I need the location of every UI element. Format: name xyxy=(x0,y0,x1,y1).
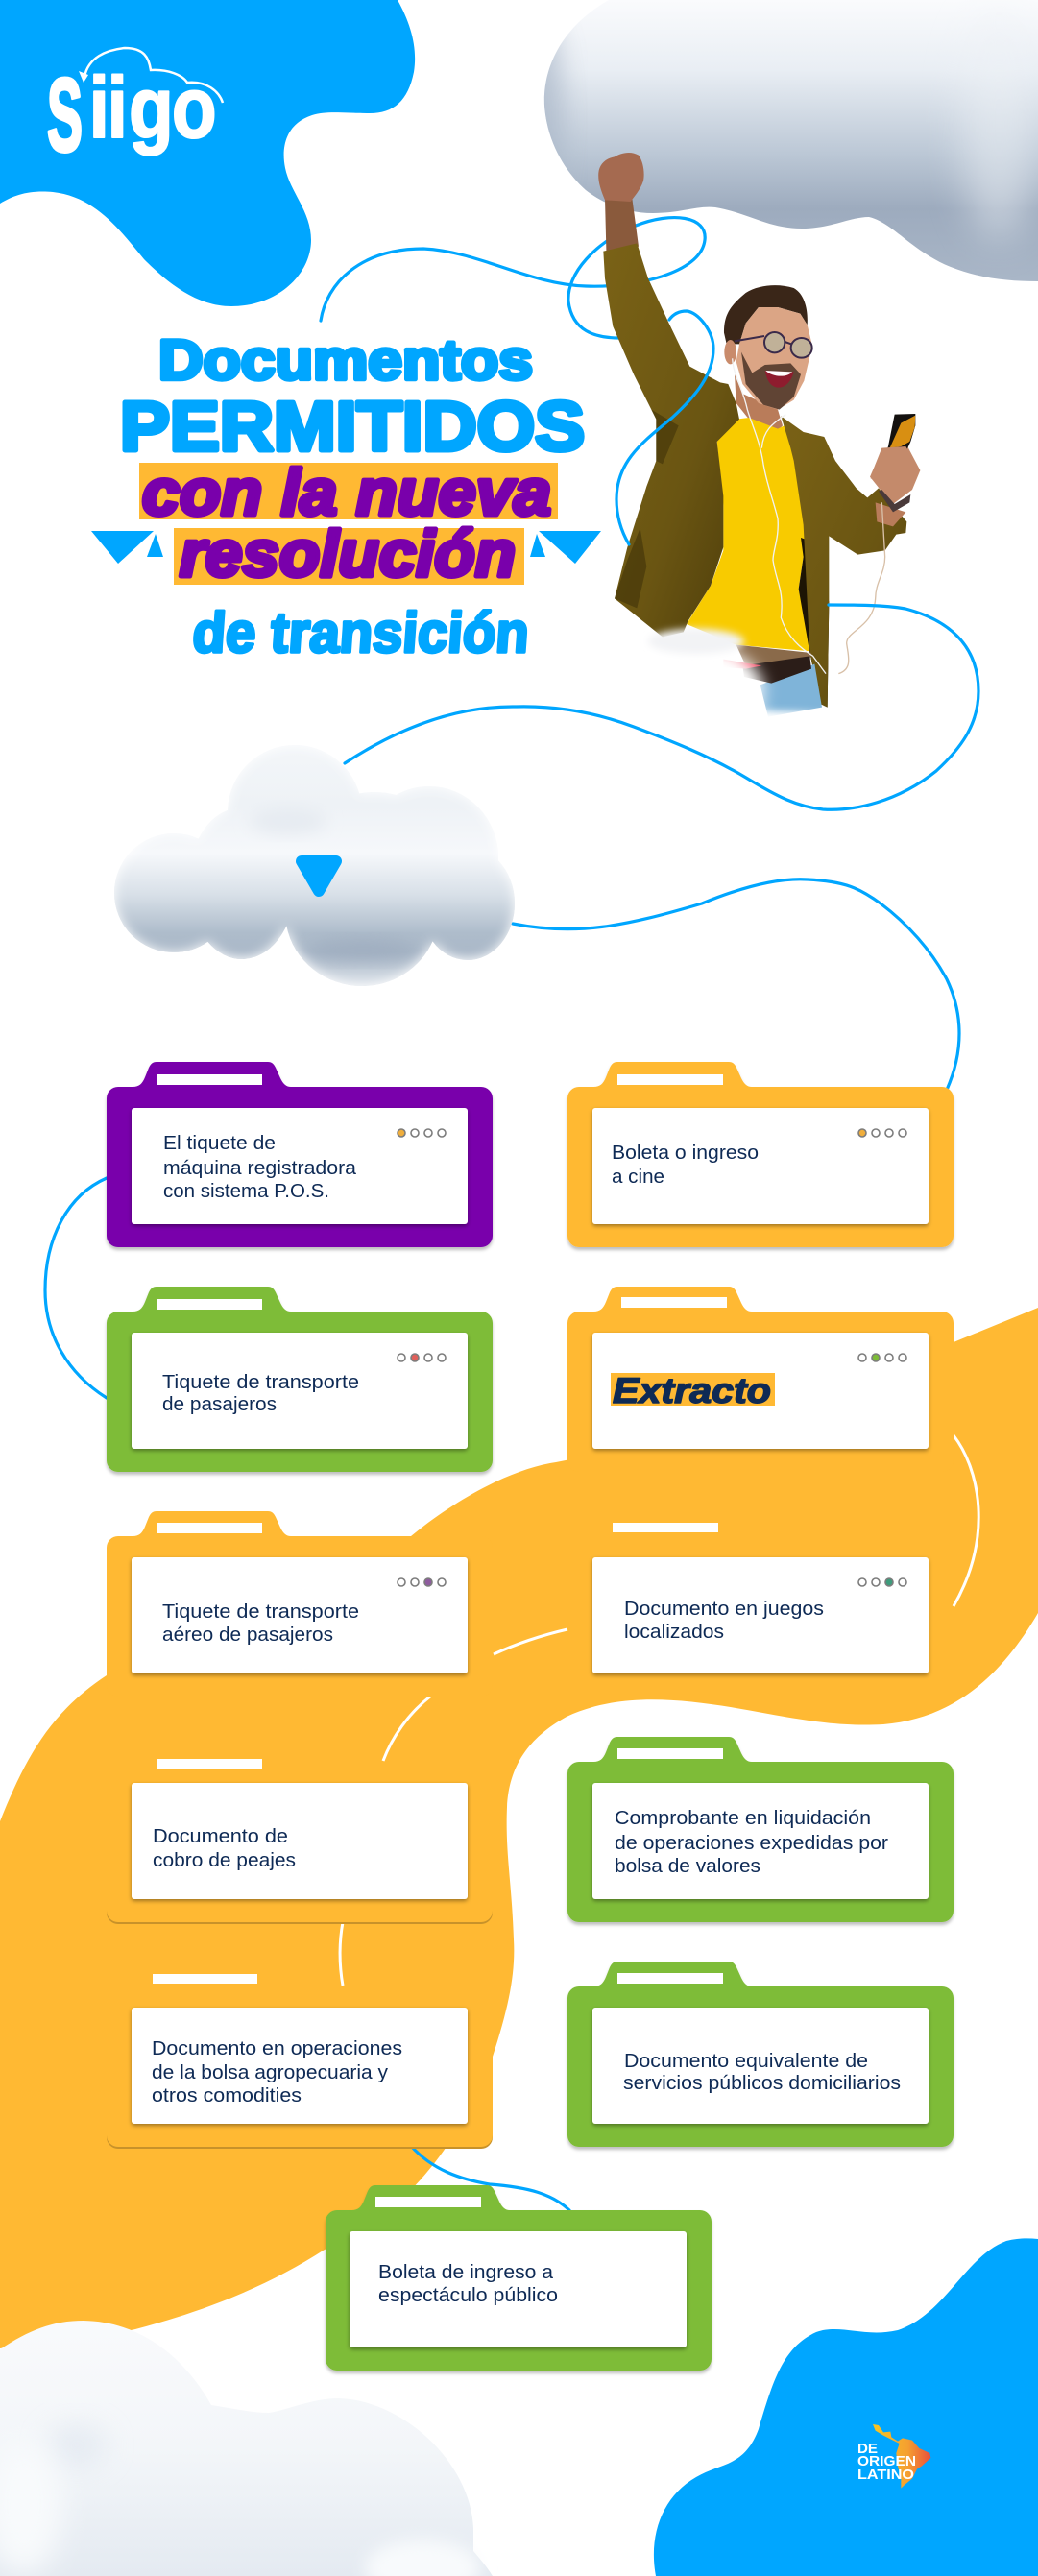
red waistband xyxy=(723,660,761,669)
connector line: in front of the man's jacket xyxy=(616,311,713,544)
glasses xyxy=(735,332,812,358)
title line: Documentos: Documentos xyxy=(158,329,533,392)
logo: Siigo: S xyxy=(47,57,83,173)
background shape: bottom-right blue blob xyxy=(654,2238,1038,2576)
connector line: right loop under the man xyxy=(345,605,978,809)
folder: Boleta o ingreso a cine: a cine xyxy=(612,1166,664,1188)
icon: blue triangle xyxy=(302,861,336,891)
connector line: cloud to first folder xyxy=(513,879,959,1090)
folder: El tiquete de máquina registradora: El tiquete de xyxy=(163,1132,276,1154)
highlight box: resolución xyxy=(174,528,524,585)
folder: Tiquete de transporte de pasajeros: de pasajeros xyxy=(162,1393,277,1415)
beard xyxy=(741,352,801,410)
folder: Documento de cobro de peajes xyxy=(107,1759,493,1924)
folder: Boleta de ingreso a espectáculo público: espectáculo público xyxy=(378,2284,558,2306)
face xyxy=(736,307,812,410)
folder: Documento en operaciones: Documento en operaciones xyxy=(152,2037,402,2059)
folder: Boleta de ingreso a espectáculo público xyxy=(326,2185,712,2371)
fist xyxy=(598,153,644,202)
cloud: centre with triangle xyxy=(106,739,523,991)
folder: Boleta o ingreso a cine: Boleta o ingreso xyxy=(612,1142,759,1164)
shirt xyxy=(687,418,811,651)
title xyxy=(91,329,601,664)
folder: Documento en juegos localizados: localizados xyxy=(624,1621,724,1643)
highlight box: con la nueva xyxy=(139,463,558,519)
cloud: top right xyxy=(543,6,1038,281)
folder: Comprobante en liquidación: bolsa de valores xyxy=(615,1855,760,1877)
phone xyxy=(876,414,915,480)
folder: El tiquete de máquina registradora: con sistema P.O.S. xyxy=(163,1180,329,1202)
folder: Documento equivalente: Documento equivalente de xyxy=(624,2050,868,2072)
photo: celebrating man with phone xyxy=(598,153,920,717)
phone cable xyxy=(838,502,885,674)
folder: Documento en juegos localizados: Documento en juegos xyxy=(624,1598,824,1620)
ear xyxy=(724,340,736,364)
background shape: yellow blob xyxy=(0,1308,1038,2348)
connector line: yellow to last folder xyxy=(411,2146,569,2210)
folder: Documento en operaciones: de la bolsa agropecuaria y xyxy=(152,2061,389,2083)
folder: Extracto xyxy=(567,1287,954,1472)
logo: De Origen Latino: ORIGEN xyxy=(857,2453,916,2469)
title line: con la nueva: con la nueva xyxy=(142,456,551,529)
logo: Siigo xyxy=(47,48,223,173)
folder: El tiquete de máquina registradora xyxy=(107,1062,493,1247)
fog: cloud around the man's waist xyxy=(619,629,936,804)
jacket left xyxy=(603,243,739,637)
folder: Extracto: Extracto xyxy=(613,1371,771,1410)
folder: Documento de cobro de peajes: Documento de xyxy=(153,1825,288,1847)
icon: left triangles xyxy=(91,531,163,564)
title line: de transición: de transición xyxy=(191,601,531,664)
background shape: top-left blue blob xyxy=(0,0,415,306)
fingers xyxy=(871,446,920,487)
white dashes on yellow blob xyxy=(340,1435,978,1986)
folder: Comprobante en liquidación: Comprobante en liquidación xyxy=(615,1807,871,1829)
hand xyxy=(870,444,920,504)
dark lining xyxy=(799,538,829,708)
folder: Documento en operaciones: otros comodities xyxy=(152,2084,302,2107)
folder: Tiquete de transporte aéreo: aéreo de pasajeros xyxy=(162,1624,333,1646)
logo: De Origen Latino: DE xyxy=(857,2441,878,2457)
logo: Siigo: iigo xyxy=(89,59,217,156)
belt xyxy=(742,656,811,684)
head hair xyxy=(724,285,808,344)
folder: Boleta de ingreso a espectáculo público: Boleta de ingreso a xyxy=(378,2261,554,2283)
raised forearm xyxy=(605,199,639,261)
folder: Documento en operaciones xyxy=(107,1974,493,2149)
folder: Documento en juegos localizados xyxy=(592,1523,929,1673)
connector line: purple to green folder xyxy=(45,1178,107,1398)
icon: Latin America map xyxy=(873,2424,930,2489)
folder: Tiquete de transporte de pasajeros: Tiquete de transporte xyxy=(162,1371,359,1393)
title line: PERMITIDOS: PERMITIDOS xyxy=(120,389,585,466)
jacket right xyxy=(781,416,906,708)
neck xyxy=(735,374,783,430)
folder: Tiquete de transporte aéreo: Tiquete de transporte xyxy=(162,1601,359,1623)
folder: El tiquete de máquina registradora: máquina registradora xyxy=(163,1157,357,1179)
earphone cable xyxy=(733,358,826,674)
wrist and watch xyxy=(876,502,905,526)
folder: Tiquete de transporte de pasajeros xyxy=(107,1287,493,1472)
cloud: bottom left xyxy=(0,2321,493,2576)
icon: right triangles xyxy=(530,531,601,564)
logo: De Origen Latino xyxy=(857,2424,930,2489)
connector line: top loop behind the man xyxy=(321,218,705,338)
title line: resolución: resolución xyxy=(180,518,516,590)
folder: Tiquete de transporte aéreo xyxy=(107,1511,493,1697)
mouth xyxy=(765,371,794,388)
jeans xyxy=(760,664,822,717)
jacket shade xyxy=(615,410,679,608)
folder: Comprobante en liquidación xyxy=(567,1737,954,1922)
folder: Documento equivalente: servicios públicos domiciliarios xyxy=(623,2072,901,2094)
folder: Documento equivalente xyxy=(567,1962,954,2147)
folder: Documento de cobro de peajes: cobro de peajes xyxy=(153,1849,296,1871)
belt area skin xyxy=(736,645,811,665)
folder: Boleta o ingreso a cine xyxy=(567,1062,954,1247)
folder: Comprobante en liquidación: de operaciones expedidas por xyxy=(615,1832,888,1854)
logo: De Origen Latino: LATINO xyxy=(857,2467,914,2483)
